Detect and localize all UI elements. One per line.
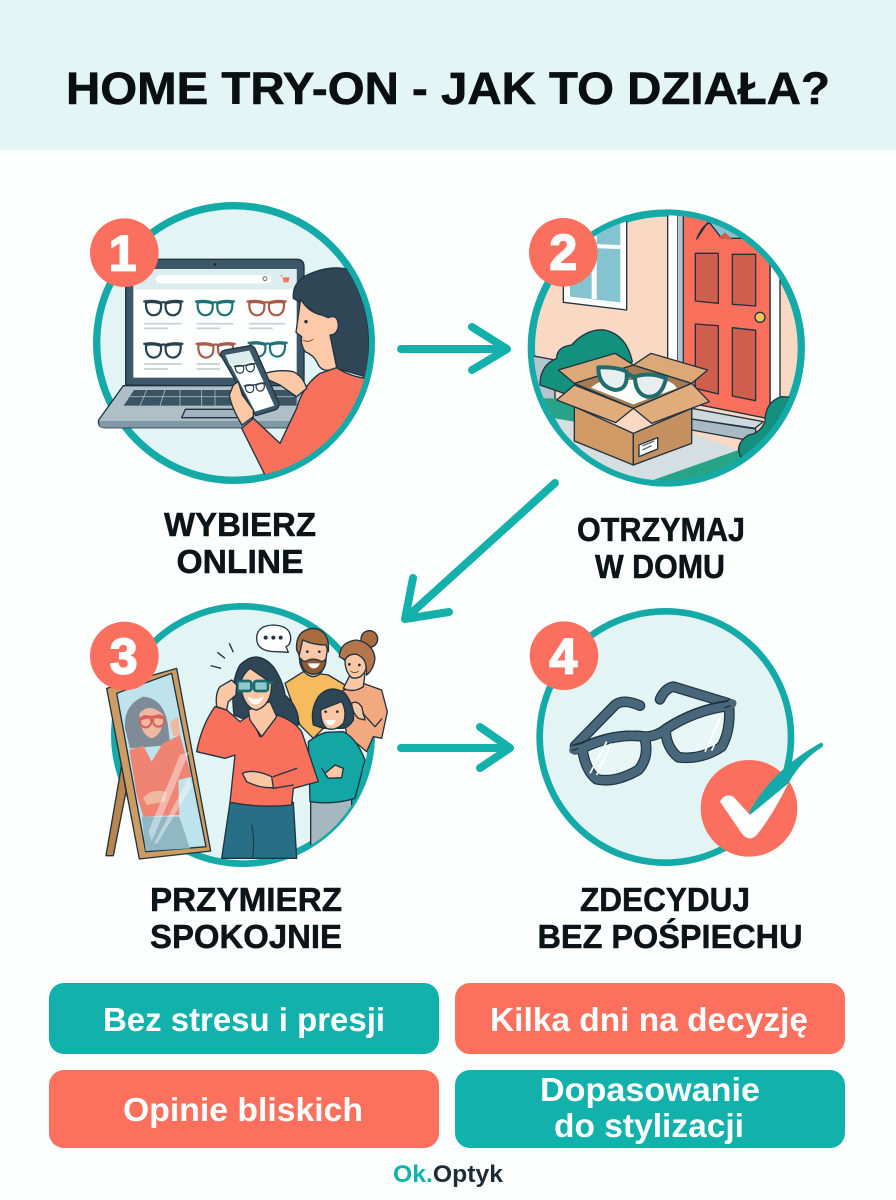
check badge [701, 743, 823, 857]
step 3 label: PRZYMIERZ [150, 881, 342, 918]
step 1 illustration: choosing online [90, 206, 373, 480]
step 2 label: OTRZYMAJ [577, 511, 745, 548]
brand logo: Ok.Optyk [393, 1161, 504, 1188]
family member: man [285, 628, 345, 738]
arrow: step 3 to 4 [401, 727, 510, 768]
arrow: step 2 to 3 [405, 483, 555, 619]
number badge 2: 2 [549, 225, 577, 281]
step 4 illustration: glasses with check [530, 611, 823, 863]
benefit: opinions [49, 1070, 439, 1148]
emphasis marks [211, 643, 233, 668]
arrow: step 1 to 2 [401, 327, 507, 370]
step 2 illustration: box at home [528, 212, 808, 495]
step 3 label: SPOKOJNIE [150, 918, 342, 955]
number badge 3: 3 [110, 628, 138, 684]
step 3 illustration: trying on with family [90, 606, 387, 864]
step 4 label: BEZ POŚPIECHU [538, 918, 802, 955]
number badge 1: 1 [109, 225, 137, 281]
step 2 label [577, 511, 745, 585]
benefit: no stress: Bez stresu i presji [103, 1001, 385, 1038]
benefit: styling: Dopasowanie [540, 1071, 760, 1108]
benefit: opinions: Opinie bliskich [123, 1091, 363, 1128]
number badge 3 [90, 622, 159, 690]
laptop [98, 259, 311, 428]
benefit: styling: do stylizacji [554, 1107, 744, 1144]
number badge 4: 4 [549, 628, 577, 684]
step 4 label: ZDECYDUJ [580, 881, 750, 918]
number badge 4 [530, 621, 598, 690]
benefit: several days [455, 983, 845, 1054]
glasses [572, 687, 732, 780]
step 3 label [150, 881, 342, 955]
step 2 label: W DOMU [595, 548, 725, 585]
benefit: styling [455, 1070, 845, 1148]
header band [0, 0, 896, 150]
family member: girl [310, 800, 352, 846]
step 4 label [538, 881, 802, 955]
step 1 label: WYBIERZ [164, 506, 316, 543]
benefit: no stress [49, 983, 439, 1054]
woman [242, 268, 373, 475]
step 1 label [164, 506, 316, 580]
step 1 label: ONLINE [176, 543, 304, 580]
family member: older woman [339, 631, 387, 752]
cardboard box with glasses [557, 353, 709, 465]
number badge 1 [90, 218, 159, 287]
main woman [197, 657, 318, 858]
speech bubble [257, 625, 291, 652]
standing mirror [106, 668, 211, 859]
benefit: several days: Kilka dni na decyzję [490, 1001, 808, 1038]
number badge 2 [529, 218, 598, 287]
phone and hands [221, 346, 307, 425]
house and door [534, 215, 790, 481]
title: HOME TRY-ON - JAK TO DZIAŁA? [66, 63, 830, 114]
